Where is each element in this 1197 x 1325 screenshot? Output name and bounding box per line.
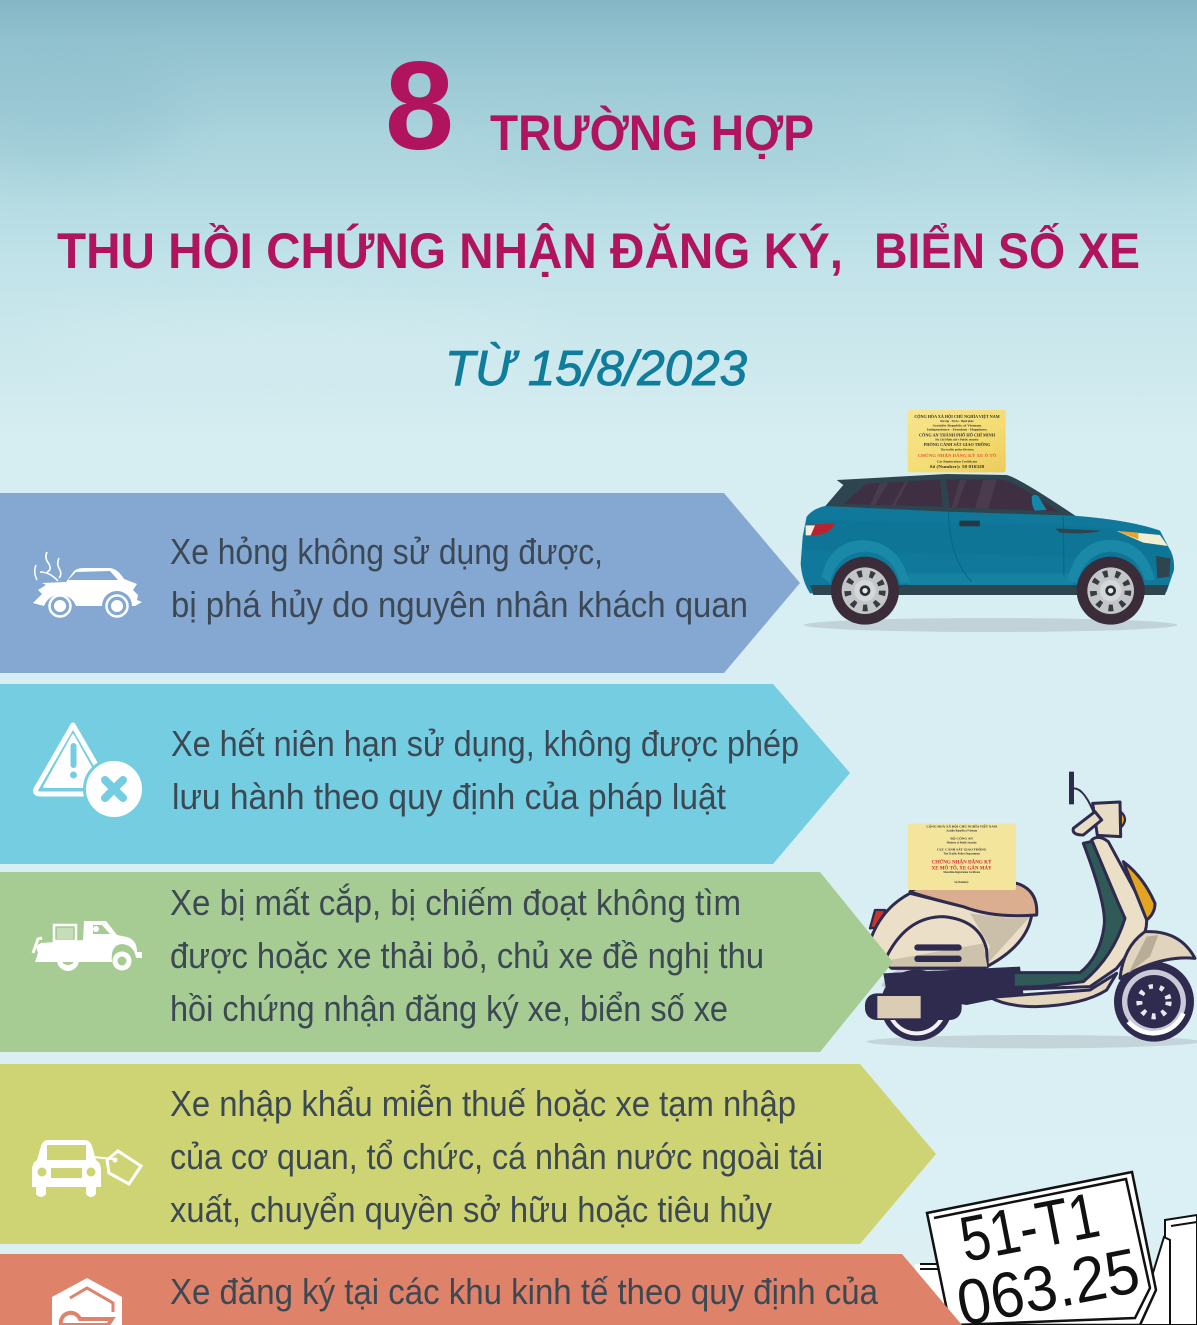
title	[57, 37, 1140, 279]
illustration: car with registration certificate: The traffic police Division	[940, 448, 974, 452]
illustration: scooter with registration certificate: CỘNG HOÀ XÃ HỘI CHỦ NGHĨA VIỆT NAM	[926, 824, 998, 829]
icon: car with price tag	[32, 1140, 141, 1197]
illustration: scooter with registration certificate: Số (Number):	[954, 881, 969, 884]
illustration: licence plates	[915, 1172, 1197, 1325]
text: case 4: Xe nhập khẩu miễn thuế hoặc xe tạm nhập	[170, 1083, 796, 1124]
text: case 4: của cơ quan, tổ chức, cá nhân nước ngoài tái	[170, 1136, 823, 1177]
title: THU HỒI CHỨNG NHẬN ĐĂNG KÝ,	[57, 223, 843, 279]
illustration: licence plates: 51-T1	[954, 1178, 1105, 1276]
illustration: car with registration certificate: Car Registration Certificate	[937, 459, 978, 463]
illustration: car with registration certificate: Socialist Republic of Vietnam	[933, 424, 982, 428]
text: case 3: Xe bị mất cắp, bị chiếm đoạt không tìm	[170, 882, 741, 923]
illustration: car with registration certificate: CÔNG AN THÀNH PHỐ HỒ CHÍ MINH	[919, 432, 995, 437]
panel: case 4	[0, 1064, 936, 1244]
illustration: scooter with registration certificate: BỘ CÔNG AN	[950, 835, 974, 840]
text: case 2: Xe hết niên hạn sử dụng, không được phép	[171, 723, 799, 764]
text: case 1: bị phá hủy do nguyên nhân khách quan	[171, 584, 748, 625]
subtitle: date: TỪ 15/8/2023	[445, 342, 747, 396]
illustration: scooter with registration certificate: XE MÔ TÔ, XE GẮN MÁY	[932, 864, 992, 871]
illustration: car with registration certificate: Independence - Freedom - Happiness	[927, 428, 988, 432]
illustration: scooter with registration certificate: Ministry of Public Security	[947, 841, 977, 844]
text: case 4: xuất, chuyển quyền sở hữu hoặc tiêu hủy	[170, 1189, 772, 1230]
text: case 3	[170, 882, 764, 1029]
panel: case 5	[0, 1254, 962, 1325]
title: TRƯỜNG HỢP	[490, 105, 814, 161]
icon: garage with key	[52, 1278, 122, 1325]
text: case 1	[170, 531, 748, 625]
title: BIỂN SỐ XE	[874, 222, 1140, 279]
illustration: car with registration certificate	[801, 410, 1177, 632]
illustration: scooter with registration certificate: Motorbike Registration Certificate	[943, 871, 981, 874]
text: case 5: Xe đăng ký tại các khu kinh tế theo quy định của	[170, 1271, 879, 1312]
illustration: car with registration certificate: Ho Chi Minh city's Public security	[935, 437, 979, 441]
illustration: car with registration certificate: CỘNG HÒA XÃ HỘI CHỦ NGHĨA VIỆT NAM	[914, 414, 1000, 419]
illustration: scooter with registration certificate	[865, 772, 1197, 1048]
illustration: car with registration certificate: CHỨNG NHẬN ĐĂNG KÝ XE Ô TÔ	[918, 453, 996, 458]
illustration: car with registration certificate: Độc lập - Tự do - Hạnh phúc	[940, 419, 974, 423]
illustration: car with registration certificate: PHÒNG CẢNH SÁT GIAO THÔNG	[924, 442, 991, 447]
text: case 3: được hoặc xe thải bỏ, chủ xe đề nghị thu	[170, 935, 764, 976]
illustration: scooter with registration certificate: Socialist Republic of Vietnam	[946, 829, 978, 832]
icon: damaged car	[33, 552, 142, 616]
illustration: car with registration certificate: Số (Number): 50 016320	[930, 465, 985, 469]
text: case 1: Xe hỏng không sử dụng được,	[170, 531, 603, 572]
text: case 2: lưu hành theo quy định của pháp luật	[172, 776, 726, 817]
panel: case 1	[0, 493, 800, 673]
illustration: scooter with registration certificate: The Traffic Police Department	[943, 852, 980, 855]
text: case 2	[171, 723, 799, 817]
text: case 4	[170, 1083, 823, 1230]
illustration: scooter with registration certificate: CHỨNG NHẬN ĐĂNG KÝ	[932, 859, 992, 865]
text: case 3: hồi chứng nhận đăng ký xe, biển số xe	[170, 988, 728, 1029]
panel: case 3	[0, 872, 893, 1052]
icon: warning with cross	[36, 725, 144, 818]
panel: case 2	[0, 684, 850, 864]
title: 8	[385, 37, 454, 176]
illustration: scooter with registration certificate: CỤC CẢNH SÁT GIAO THÔNG	[937, 847, 987, 852]
icon: pickup truck with safe	[33, 921, 142, 971]
